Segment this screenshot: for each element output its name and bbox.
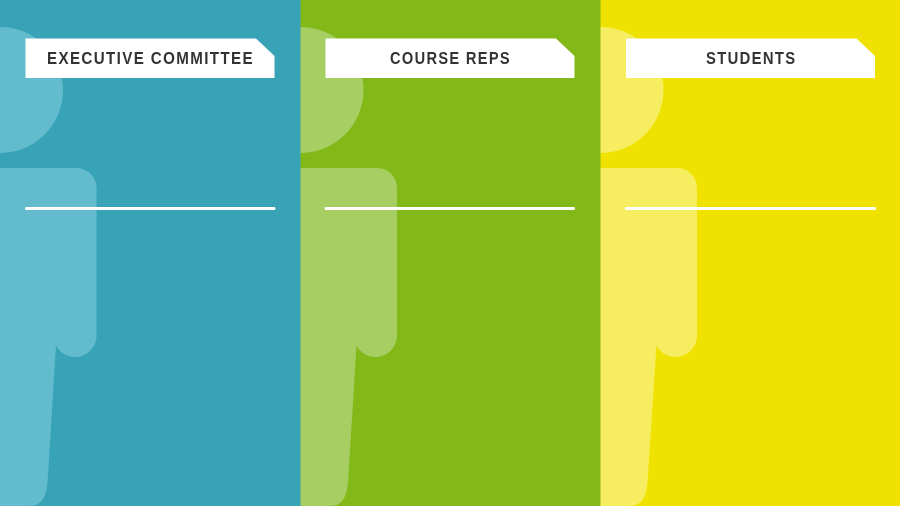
divider line <box>324 207 575 210</box>
icon: person silhouette <box>0 27 97 506</box>
panel: executive committee <box>0 27 276 506</box>
heading label: students: STUDENTS <box>706 48 796 68</box>
icon: person silhouette <box>600 27 697 506</box>
panel: students <box>600 0 900 506</box>
heading label: executive committee <box>26 38 274 78</box>
divider line <box>25 207 276 210</box>
divider line <box>625 207 876 210</box>
heading label: course reps <box>326 38 574 78</box>
heading label: course reps: COURSE REPS <box>390 48 511 68</box>
heading label: students <box>626 38 875 78</box>
panel: course reps <box>300 0 600 506</box>
heading label: executive committee: EXECUTIVE COMMITTEE <box>47 48 254 68</box>
icon: person silhouette <box>300 27 397 506</box>
